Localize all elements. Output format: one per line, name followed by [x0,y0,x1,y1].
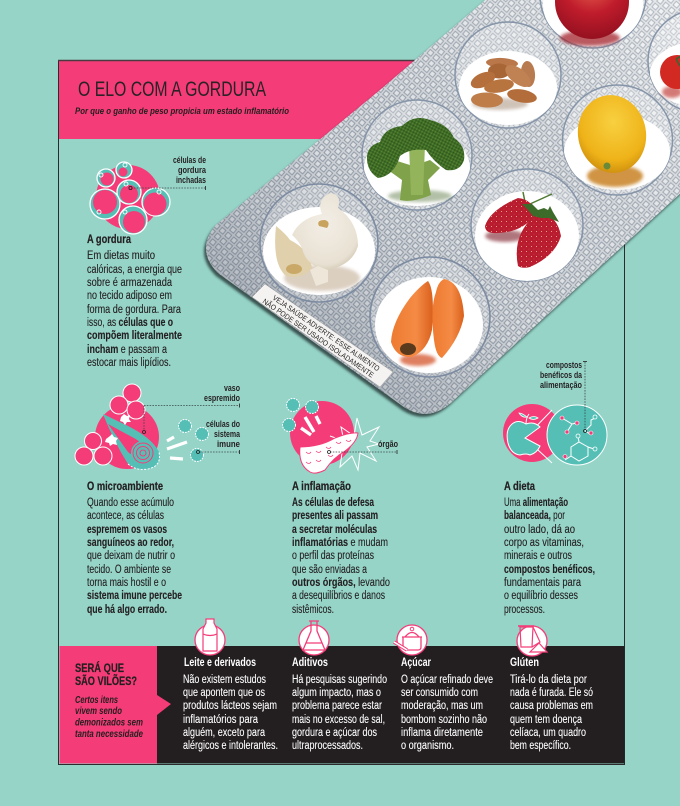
subtitle: Por que o ganho de peso propicia um estado inflamatório [75,106,289,117]
panel: pink footer callout: SÃO VILÕES? [75,673,137,688]
label: diet: benéficos da [540,370,583,380]
blister: apple [540,0,646,48]
text block: glúten: celíaca, um quadro [510,727,586,739]
text block: o microambiente: Quando esse acúmulo [87,497,174,509]
label: microenvironment: vaso [224,383,240,393]
text block: açúcar [401,655,493,752]
label: fat cells: inchadas [176,175,206,185]
warning label: VEJA SAÚDE ADVERTE: ESSE ALIMENTO [271,293,382,373]
label: diet [540,360,583,390]
text block: açúcar: moderação, mas um [401,700,483,712]
text block: a inflamação: inflamatórias e mudam [292,537,388,549]
text block: aditivos: gordura e açúcar dos [292,727,377,739]
text block: açúcar: Açúcar [401,655,431,669]
label: microenvironment: sistema [214,429,241,439]
text block: leite e derivados [183,655,278,752]
text block: a inflamação: o perfil das proteínas [292,550,374,562]
label: diet: compostos [546,360,582,370]
panel: pink footer callout: SERÁ QUE [75,660,124,675]
text block: a dieta: balanceada, por [504,510,565,522]
panel: dark footer [157,646,624,764]
text block: a dieta: fundamentais para [504,577,581,589]
title: O ELO COM A GORDURA [78,78,266,101]
text block: a inflamação: outros órgãos, levando [292,577,390,589]
text block: a dieta: compostos benéficos, [504,564,595,576]
text block: leite e derivados: que apontem que os [183,687,265,699]
text block: leite e derivados: Leite e derivados [184,655,256,669]
text block: a gordura: incham e passam a [87,344,167,356]
text block: a dieta: corpo as vitaminas, [504,537,584,549]
text block: a gordura: sobre é armazenada [87,277,172,289]
frame [58,60,624,764]
panel: header [58,60,418,139]
icon: sugar bowl [394,625,427,655]
text block: o microambiente: tecido. O ambiente se [87,564,171,576]
text block: aditivos [292,655,387,752]
icon: diet [503,362,607,465]
text block: a gordura: A gordura [87,232,131,246]
text block: a dieta: Uma alimentação [504,497,568,509]
icon: flask [299,621,329,655]
text block: açúcar: inflama diretamente [401,727,483,739]
label: microenvironment [204,383,241,449]
text block: a inflamação: a desequilíbrios e danos [292,590,385,602]
panel: pink footer callout: vivem sendo [75,706,122,717]
label: fat cells [173,155,207,185]
text block: açúcar: bombom sozinho não [401,714,487,726]
icon: fat cells [90,162,206,234]
text block: leite e derivados: produtos lácteos sejam [183,700,277,712]
text block: açúcar: O açúcar refinado deve [401,674,493,686]
text block: a gordura [87,232,182,369]
label: microenvironment: células do [206,419,240,429]
blister: lemon [562,85,672,195]
text block: aditivos: Aditivos [292,655,328,669]
text block: glúten: Tirá-lo da dieta por [510,674,587,686]
text block: glúten: nada é furada. Ele só [510,687,593,699]
text block: glúten [510,655,593,752]
text block: aditivos: problema parece estar [292,700,382,712]
blister: almonds [455,22,561,128]
icon: bread [517,626,547,656]
label: fat cells: células de [173,155,206,165]
text block: a dieta: outro lado, dá ao [504,524,575,536]
blister: strawberries [471,169,583,281]
text block: aditivos: Há pesquisas sugerindo [292,674,387,686]
foil sheet [206,0,680,414]
text block: o microambiente: torna mais hostil e o [87,577,166,589]
text block: aditivos: ultraprocessados. [292,740,363,752]
warning label: NÃO PODE SER USADO ISOLADAMENTE [261,297,376,379]
text block: a dieta: minerais e outros [504,550,572,562]
label: microenvironment: espremido [204,393,240,403]
text block: a gordura: no tecido adiposo em [87,290,172,302]
text block: leite e derivados: Não existem estudos [183,674,266,686]
label: diet: alimentação [540,380,582,390]
text block: a gordura: isso, as células que o [87,317,173,329]
blister: tomato [648,9,680,113]
text block: a dieta: A dieta [504,479,535,493]
text block: glúten: bem específico. [510,740,571,752]
text block: glúten: quem tem doença [510,714,582,726]
label: microenvironment: imune [217,439,240,449]
blister pack photo [206,0,680,414]
text block: a inflamação: A inflamação [292,479,351,493]
text block: a inflamação: As células de defesa [292,497,374,509]
blister: broccoli [362,100,472,210]
text block: glúten: causa problemas em [510,700,593,712]
text block: o microambiente: espremem os vasos [87,524,167,536]
text block: o microambiente: sistema imune percebe [87,590,182,602]
text block: a gordura: compõem literalmente [87,330,182,342]
label: organ: órgão [378,439,398,449]
text block: a gordura: forma de gordura. Para [87,304,181,316]
text block: o microambiente: sanguíneos ao redor, [87,537,174,549]
label: fat cells: gordura [178,165,207,175]
icon: inflammation [282,398,397,473]
text block: a inflamação: sistêmicos. [292,604,334,616]
text block: leite e derivados: inflamatórios para [183,714,258,726]
text block: leite e derivados: alguém, exceto para [183,727,265,739]
blister: carrots [370,257,490,377]
panel: pink footer callout: Certos itens [75,695,118,706]
text block: leite e derivados: alérgicos e intolerantes. [183,740,278,752]
text block: açúcar: o organismo. [401,740,454,752]
text block: a inflamação: a secretar moléculas [292,524,377,536]
text block: o microambiente: O microambiente [87,479,163,493]
text block: a inflamação: que são enviadas a [292,564,367,576]
text block: a gordura: Em dietas muito [87,250,155,262]
text block: o microambiente [87,479,182,616]
text block: a inflamação [292,479,390,616]
icon: microenvironment [75,384,240,469]
text block: açúcar: ser consumido com [401,687,478,699]
text block: aditivos: algum impacto, mas o [292,687,381,699]
panel: pink footer callout: tanta necessidade [75,729,143,740]
text block: aditivos: mais no excesso de sal, [292,714,385,726]
text block: a gordura: calóricas, a energia que [87,264,182,276]
text block: a dieta [504,479,595,616]
text block: o microambiente: que há algo errado. [87,604,167,616]
text block: o microambiente: acontece, as células [87,510,164,522]
blister: garlic [260,184,378,302]
text block: a dieta: processos. [504,604,545,616]
text block: a dieta: o equilíbrio desses [504,590,578,602]
panel: pink footer callout: demonizados sem [75,718,143,728]
panel: pink footer callout [60,646,171,764]
text block: a gordura: estocar mais lipídios. [87,357,171,369]
text block: o microambiente: que deixam de nutrir o [87,550,175,562]
text block: a inflamação: presentes ali passam [292,510,378,522]
text block: glúten: Glúten [510,655,539,669]
icon: milk bottle [195,619,225,655]
